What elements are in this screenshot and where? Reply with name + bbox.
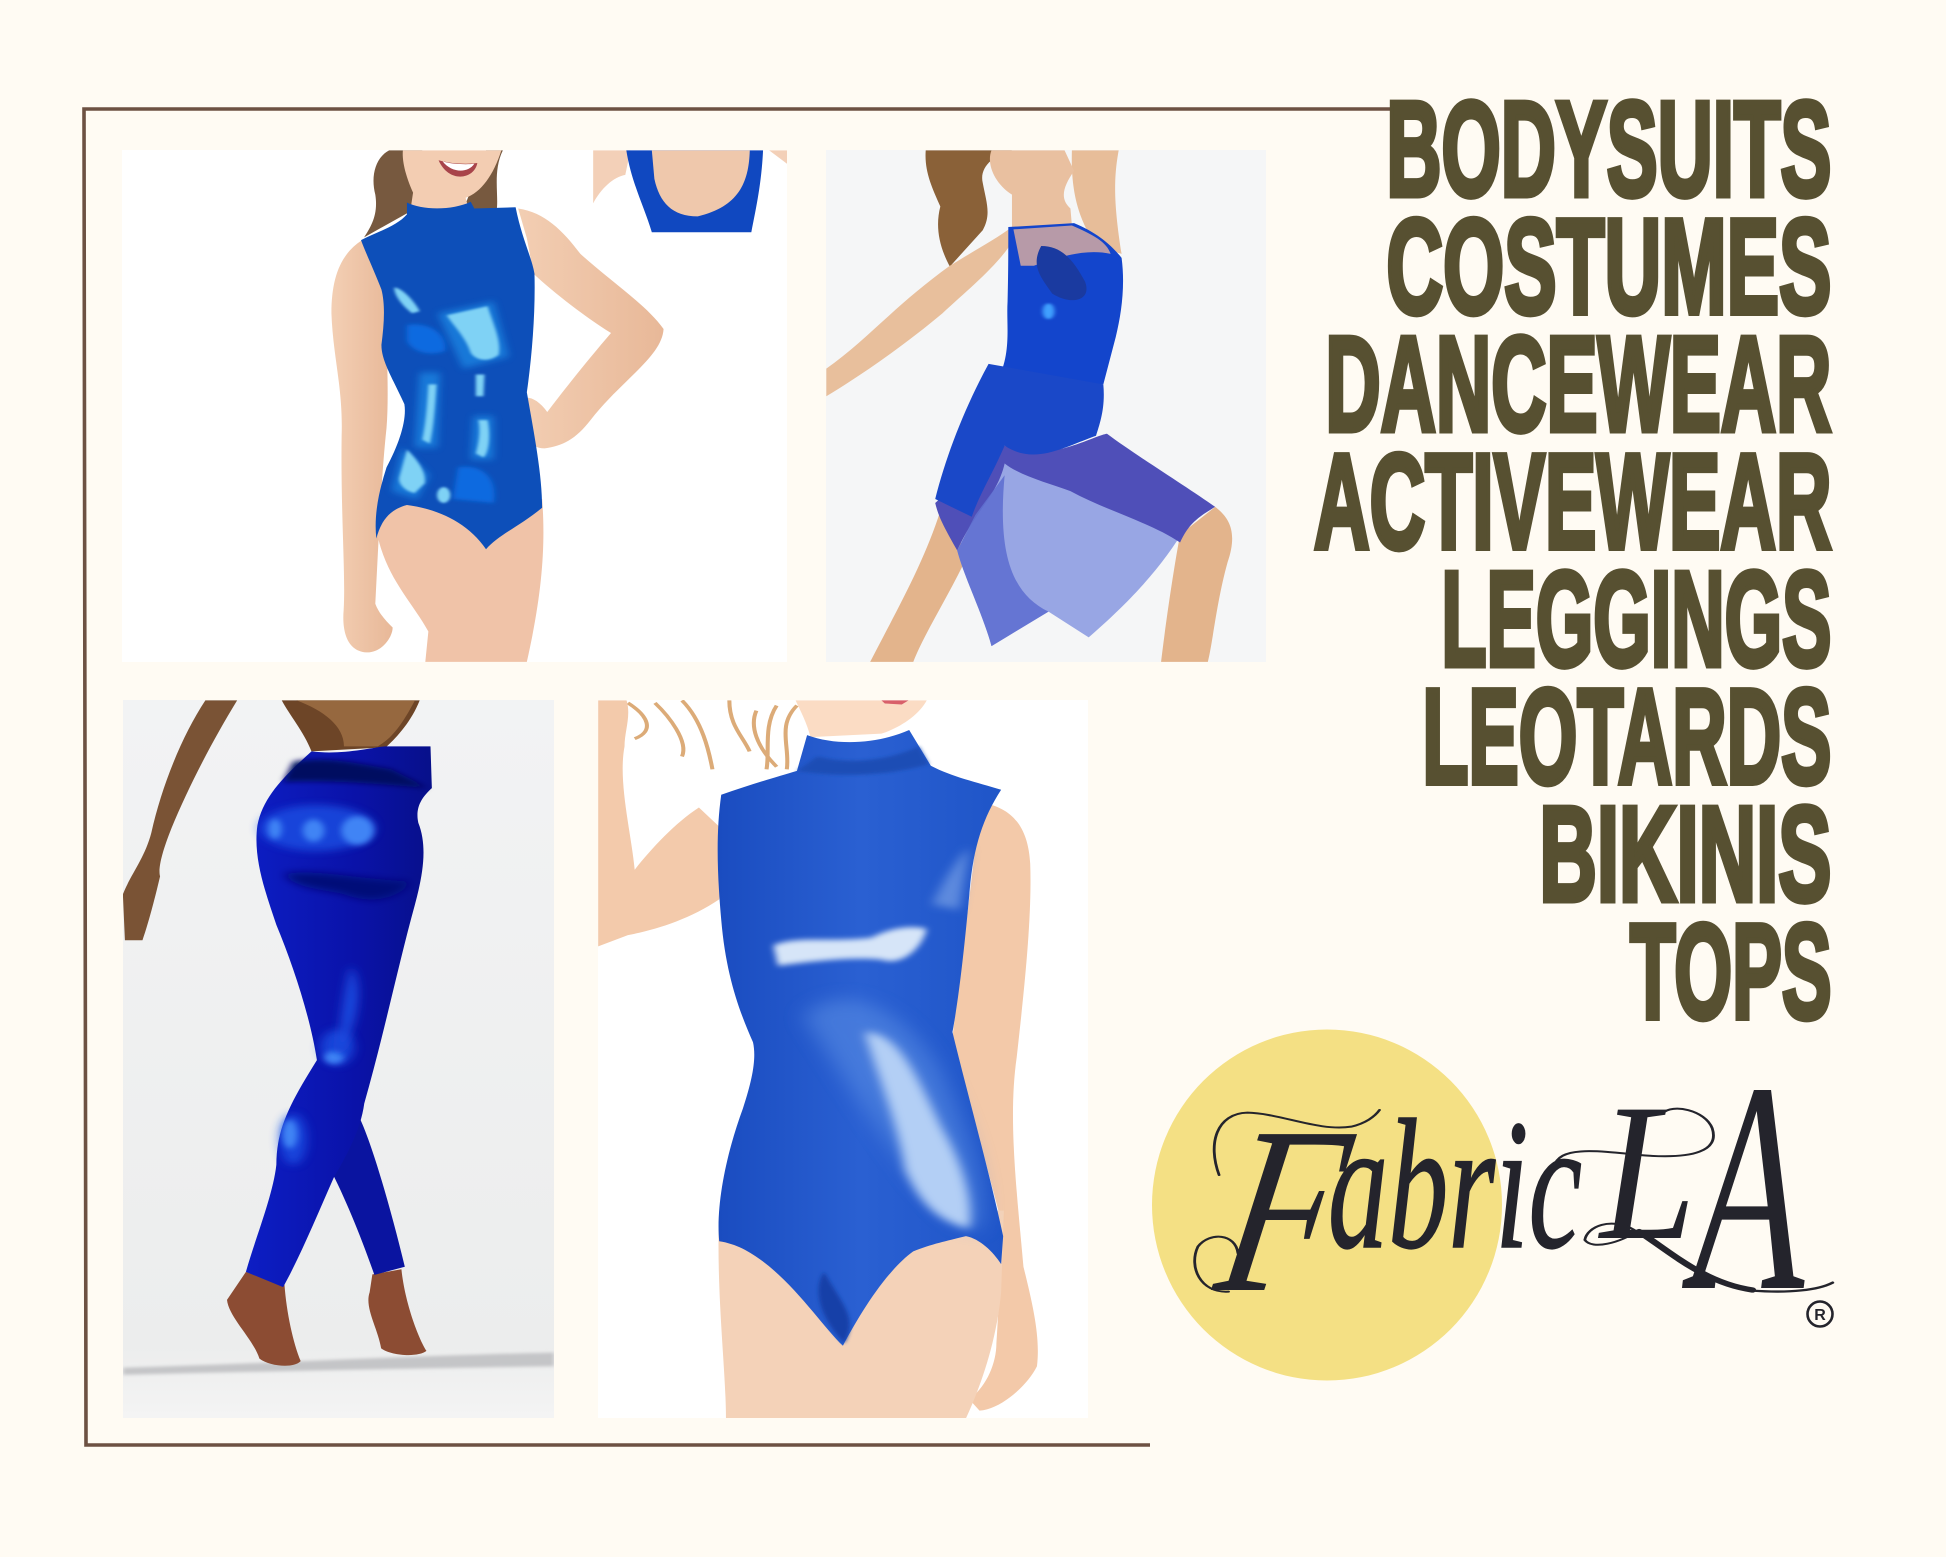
logo: registered mark [1808,1302,1832,1326]
logo: registered mark: R [1814,1307,1826,1324]
raised arm [1072,150,1122,254]
dancer hair [926,150,1012,267]
model legs [377,499,543,662]
left leg [870,511,968,662]
leggings highlights [268,816,374,1148]
logo: FabricLA wordmark: F [1201,1078,1367,1342]
right leg [1161,507,1232,662]
right arm [952,802,1038,1411]
outstretched arm [826,227,1012,396]
skirt mesh lower [957,463,1179,646]
right foot [368,1269,426,1355]
photo: high-neck shiny blue leotard [598,700,1088,1418]
back leg [330,1114,405,1275]
leotard highlights [773,927,927,966]
chin and neck [796,700,927,737]
leggings shadow [283,872,412,899]
applique [1037,246,1086,300]
dress bodice [997,223,1123,384]
logo: FabricLA wordmark: A [1681,1021,1807,1353]
floor shadow [123,1352,554,1375]
model left arm [331,240,393,652]
frame line [84,109,1390,1445]
model hair [364,150,503,237]
dancer head and neck [990,150,1074,227]
bare arm [123,700,237,940]
raised arm [598,700,726,946]
bare back [282,700,420,751]
logo: yellow circle [1152,1030,1502,1380]
sheer yoke [1013,225,1111,266]
bodysuit shading [407,324,494,503]
model face and neck [402,150,502,208]
photo: shiny blue leggings [123,700,554,1418]
logo: FabricLA wordmark: abric [1328,1082,1582,1288]
leotard shading [797,746,929,775]
model hair strands [628,700,797,769]
leggings glow [259,805,374,1165]
skirt mesh mid [935,434,1215,550]
metallic glow [392,301,509,499]
leotard [718,730,1003,1346]
metallic leggings [246,746,432,1287]
waistband shadow [283,760,428,788]
logo flourishes [1195,1109,1833,1292]
left foot [227,1272,301,1366]
logo: FabricLA wordmark [1195,1021,1833,1353]
model smile [439,160,477,177]
metallic highlights [394,288,499,503]
photo: metallic blue bodysuit with back inset [122,150,787,662]
product list heading [1314,74,1832,1047]
logo: FabricLA wordmark: L [1597,1064,1696,1281]
photo: blue lyrical dance costume [826,150,1266,662]
wrap skirt panel [935,364,1104,517]
legs [719,1211,1004,1418]
leotard glow [804,999,981,1231]
inset: back view of suit [593,150,787,232]
metallic bodysuit [361,202,542,549]
model right arm [513,208,664,448]
